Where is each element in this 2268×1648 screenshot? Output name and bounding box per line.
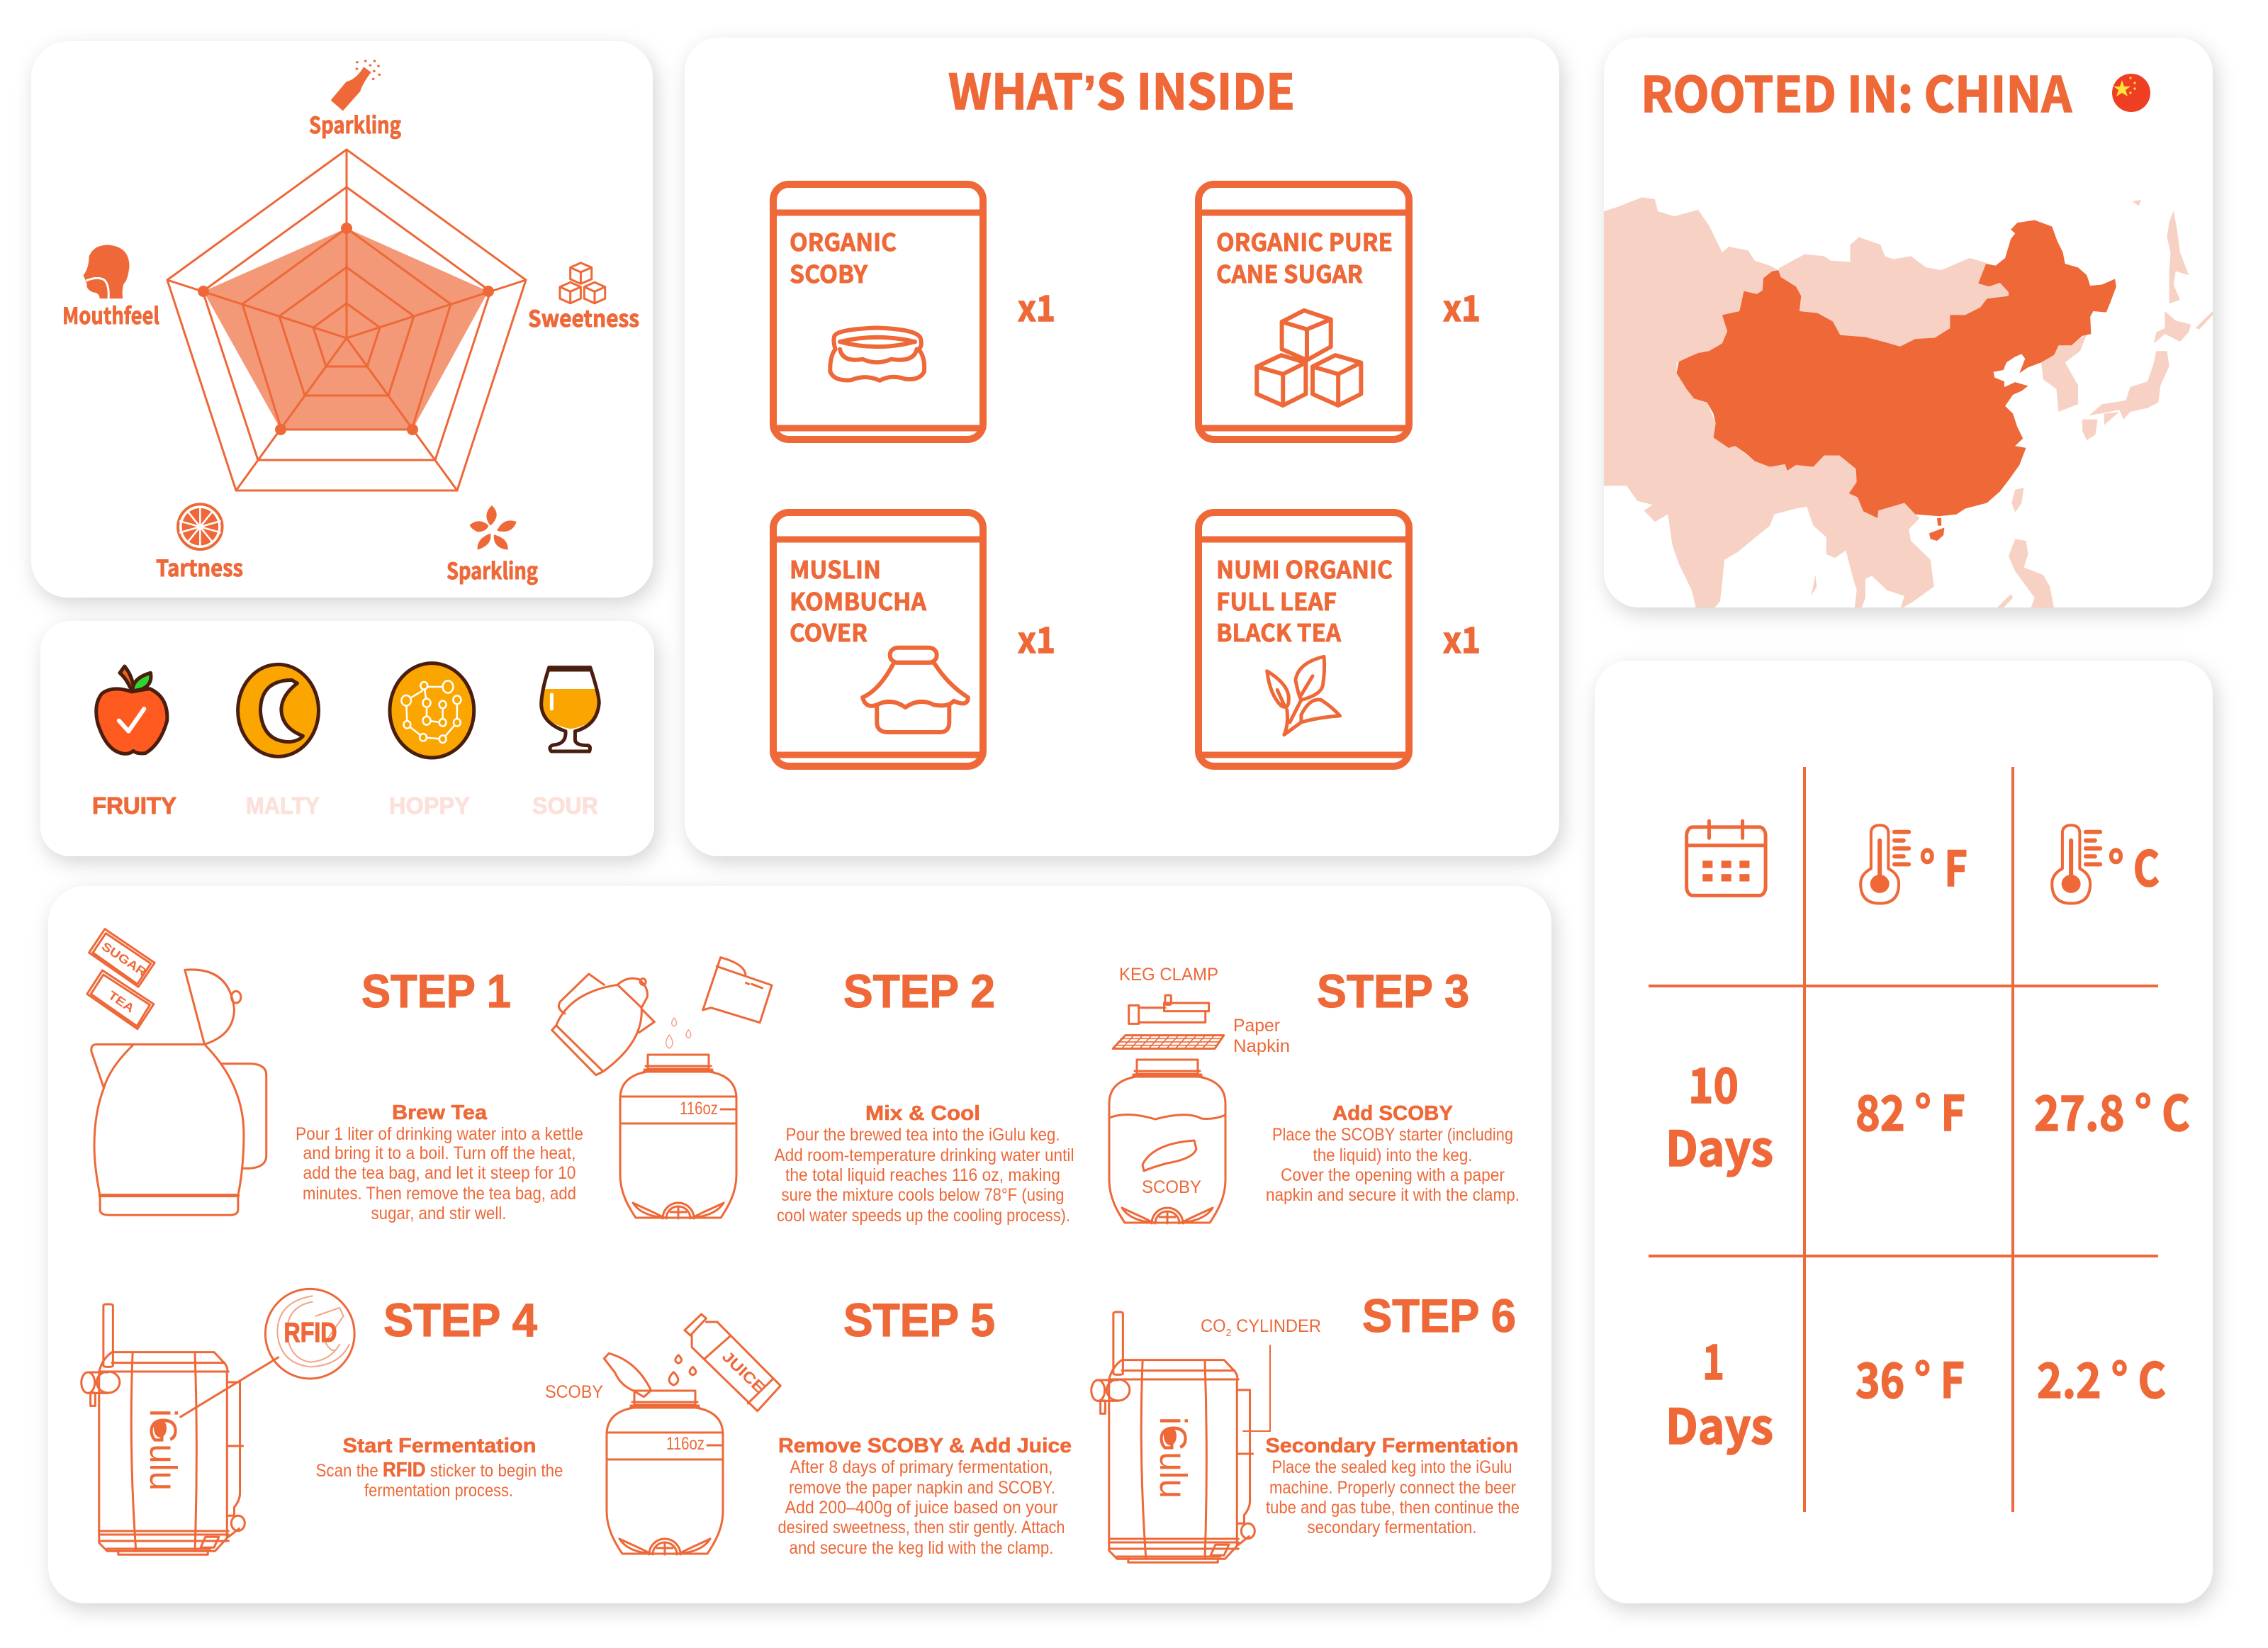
item: organic scoby: ORGANIC [790,223,897,258]
row: 10 days: 10 [1688,1047,1739,1117]
text: add scoby instructions: Cover the opening with a paper [1281,1165,1505,1185]
step 2 [552,958,1074,1226]
icon: moon malt [238,664,319,756]
panel: flavour radar [31,41,653,598]
item: organic pure cane sugar: ORGANIC PURE [1216,223,1393,258]
heading: STEP 4: STEP 4 [383,1294,537,1346]
row: 1 day: 2.2 ° C [2037,1342,2166,1412]
heading: WHAT'S INSIDE: WHAT’S INSIDE [948,53,1295,123]
icon: keg 116oz [620,1055,736,1218]
label: TEA packet: TEA [106,988,137,1016]
item: organic pure cane sugar [1198,184,1481,439]
icon: thermometer celsius [2052,825,2100,904]
subheading: Add SCOBY: Add SCOBY [1332,1102,1453,1125]
row: 10 days: 82 ° F [1856,1075,1965,1145]
text: secondary fermentation instructions: machine. Properly connect the beer [1269,1478,1516,1498]
text: remove scoby instructions: After 8 days of primary fermentation, [790,1457,1053,1477]
label: Paper Napkin: Napkin [1233,1036,1290,1056]
icon: sugar cubes small [560,263,605,303]
row: 10 days: Days [1666,1110,1773,1180]
text: mix and cool instructions: sure the mixture cools below 78°F (using [781,1185,1065,1205]
text: add scoby instructions [1266,1125,1520,1205]
label: Sweetness: Sweetness [528,301,639,334]
icon: keg with scoby [1109,1060,1225,1223]
panel: what's inside [685,38,1559,856]
text: secondary fermentation instructions: tube and gas tube, then continue the [1266,1498,1520,1518]
text: remove scoby instructions: desired sweetness, then stir gently. Attach [778,1518,1065,1537]
icon: drops [666,1018,691,1048]
icon: clamp [1129,995,1209,1024]
label: Sparkling (bottom): Sparkling [447,554,538,586]
quantity: x1 [1018,281,1055,332]
text: secondary fermentation instructions [1266,1457,1520,1537]
quantity: x1 [1443,612,1481,663]
item: muslin kombucha cover: COVER [790,614,868,649]
row: 1 day: 1 [1702,1323,1724,1394]
label: degrees F: ° F [1919,830,1967,900]
text: mix and cool instructions: Add room-temperature drinking water until [774,1145,1074,1165]
text: remove scoby instructions [778,1457,1065,1558]
icon: kettle and packets [87,929,266,1215]
subheading: Brew Tea: Brew Tea [392,1102,488,1124]
quantity: x1 [1018,612,1055,663]
step 5 [545,1294,1072,1558]
text: remove scoby instructions: Add 200–400g of juice based on your [785,1498,1057,1518]
panel: beer styles [40,621,654,856]
label: SOUR: SOUR [532,792,598,819]
map: east asia [1604,197,2213,609]
label: Tartness: Tartness [156,551,243,583]
row: 1 day: Days [1666,1388,1773,1458]
text: add scoby instructions: Place the SCOBY starter (including [1272,1125,1513,1145]
label: 116oz: 116oz [680,1099,718,1119]
text: mix and cool instructions [774,1125,1074,1226]
row: 10 days: 27.8 ° C [2034,1075,2190,1145]
label: CO2 cylinder: CO [1201,1316,1228,1336]
label: JUICE bottle: JUICE [719,1347,769,1396]
text: brew tea instructions: Pour 1 liter of drinking water into a kettle [296,1124,583,1144]
subheading: Start Fermentation: Start Fermentation [343,1435,536,1457]
label: MALTY: MALTY [246,792,320,819]
icon: calendar [1687,821,1765,895]
label: degrees C: ° C [2108,830,2160,900]
item: organic scoby: SCOBY [790,255,868,290]
label: SCOBY: SCOBY [545,1382,603,1402]
icon: paper napkin [1113,1036,1224,1048]
heading: STEP 3: STEP 3 [1317,965,1469,1017]
label: CO2 cylinder: 2 [1226,1327,1231,1339]
item: numi organic black tea [1198,512,1481,766]
item: numi organic black tea: NUMI ORGANIC [1216,551,1393,585]
heading: ROOTED IN: CHINA: ROOTED IN: CHINA [1641,55,2072,126]
item: numi organic black tea: FULL LEAF [1216,583,1337,617]
text: brew tea instructions: and bring it to a boil. Turn off the heat, [303,1143,576,1163]
label: Sparkling: Sparkling [309,108,401,140]
icon: iGulu machine with CO2 line: iGulu [1152,1417,1194,1498]
label: SUGAR packet: SUGAR [99,939,149,979]
icon: flower [470,505,517,550]
item: numi organic black tea: BLACK TEA [1216,614,1341,649]
heading: STEP 2: STEP 2 [843,965,995,1017]
row: 1 day [1666,1323,2166,1458]
label: CO2 cylinder: CYLINDER [1231,1316,1321,1336]
text: secondary fermentation instructions: secondary fermentation. [1307,1518,1477,1537]
row: 1 day: 36 ° F [1856,1342,1965,1412]
text: brew tea instructions: sugar, and stir well. [371,1204,506,1223]
icon: orange slice [178,504,223,549]
icon: iGulu machine with RFID: iGulu [142,1409,184,1491]
label: SCOBY in keg: SCOBY [1142,1177,1201,1197]
icon: iGulu machine with RFID [82,1289,354,1554]
icon: china flag [2112,74,2150,112]
label: KEG CLAMP: KEG CLAMP [1119,965,1218,985]
icon: hop [390,663,474,758]
text: mix and cool instructions: cool water speeds up the cooling process). [777,1206,1070,1226]
label: FRUITY: FRUITY [92,792,176,819]
text: mix and cool instructions: the total liquid reaches 116 oz, making [785,1165,1060,1185]
icon: scoby lifted, drops and juice bottle [604,1314,780,1411]
item: muslin kombucha cover: KOMBUCHA [790,583,926,617]
item: muslin kombucha cover [773,512,1055,766]
text: brew tea instructions: add the tea bag, and let it steep for 10 [303,1163,576,1183]
neighbouring countries [1604,197,2213,609]
text: start fermentation instructions: Scan the RFID sticker to begin the [316,1459,563,1481]
heading: STEP 1: STEP 1 [361,965,511,1017]
label: Paper Napkin: Paper [1233,1016,1280,1036]
text: start fermentation instructions: fermentation process. [364,1481,513,1501]
icon: glass [541,668,599,751]
text: remove scoby instructions: remove the paper napkin and SCOBY. [789,1478,1055,1498]
step 4 [82,1289,563,1554]
label: 116oz: 116oz [666,1434,704,1454]
label: HOPPY: HOPPY [389,792,470,819]
item: muslin kombucha cover: MUSLIN [790,551,881,585]
subheading: Remove SCOBY & Add Juice: Remove SCOBY & Add Juice [778,1435,1072,1457]
panel: rooted in china [1604,38,2213,609]
icon: bottle [331,60,381,111]
icon: head [84,245,129,298]
radar chart [167,150,526,491]
item: organic pure cane sugar: CANE SUGAR [1216,255,1363,290]
text: secondary fermentation instructions: Place the sealed keg into the iGulu [1271,1457,1512,1477]
row: 10 days [1666,1047,2190,1180]
china [1677,220,2116,541]
icon: tea leaves [1267,656,1340,735]
icon: scoby [830,327,924,381]
subheading: Secondary Fermentation: Secondary Fermentation [1266,1435,1518,1457]
icon: apple [96,666,167,753]
item: organic scoby [773,184,1055,439]
icon: sugar cubes [1257,310,1361,405]
text: add scoby instructions: the liquid) into the keg. [1313,1145,1473,1165]
icon: iGulu machine with RFID: RFID [284,1318,337,1348]
label: Mouthfeel: Mouthfeel [62,298,159,331]
panel: fermentation schedule table [1595,661,2213,1603]
label: Paper Napkin [1233,1016,1290,1056]
step 3 [1109,965,1520,1223]
text: remove scoby instructions: and secure the keg lid with the clamp. [790,1538,1053,1558]
text: brew tea instructions [296,1124,583,1223]
heading: STEP 6: STEP 6 [1362,1289,1516,1342]
quantity: x1 [1443,281,1481,332]
text: add scoby instructions: napkin and secure it with the clamp. [1266,1185,1520,1205]
icon: pouring kettle and pitcher [552,958,772,1075]
text: start fermentation instructions [316,1459,563,1501]
heading: STEP 5: STEP 5 [843,1294,995,1346]
table grid [1649,767,2158,1512]
subheading: Mix & Cool: Mix & Cool [865,1102,980,1125]
icon: jar with cover [863,648,968,732]
icon: iGulu machine with CO2 line [1091,1312,1270,1562]
step 6 [1091,1289,1520,1562]
panel: fermentation steps [48,886,1551,1603]
icon: thermometer fahrenheit [1860,825,1909,904]
text: brew tea instructions: minutes. Then remove the tea bag, add [303,1184,576,1204]
text: mix and cool instructions: Pour the brewed tea into the iGulu keg. [785,1125,1060,1145]
step 1 [87,929,583,1223]
icon: keg 116oz [607,1391,723,1554]
